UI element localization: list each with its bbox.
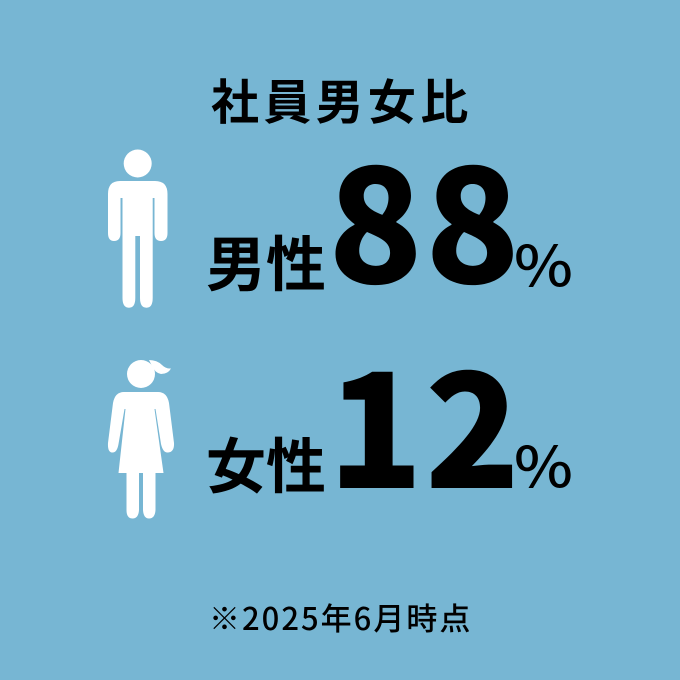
icon: male figure bbox=[108, 150, 168, 308]
icon: female figure bbox=[108, 360, 174, 518]
percent sign: female: % bbox=[514, 423, 573, 504]
label: male: 男性 bbox=[206, 217, 326, 304]
percent sign: male: % bbox=[514, 222, 573, 303]
label: female: 女性 bbox=[206, 419, 326, 506]
footnote: ※2025年6月時点 bbox=[209, 594, 472, 639]
value: male 88: 88 bbox=[328, 102, 522, 328]
title: 社員男女比 bbox=[211, 63, 473, 133]
value: female 12: 12 bbox=[328, 307, 522, 533]
